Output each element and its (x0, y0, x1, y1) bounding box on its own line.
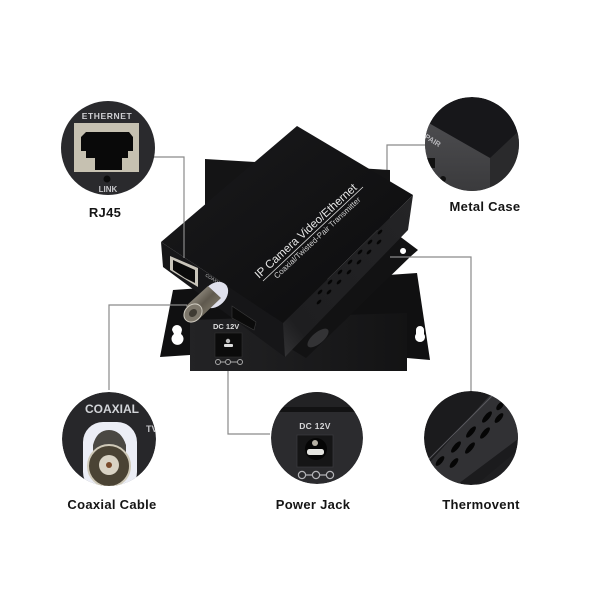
upper unit: RJ45 port (170, 256, 198, 287)
socket (74, 123, 139, 172)
label: thermovent: Thermovent (442, 497, 520, 512)
led (104, 176, 110, 182)
product photo: two stacked transceivers (160, 126, 430, 371)
case front face (425, 124, 490, 191)
case screw hole (440, 176, 446, 182)
upper unit: port label: COAXIAL (204, 273, 224, 287)
label: power jack: Power Jack (276, 497, 351, 512)
upper unit: front face (161, 242, 285, 357)
label: metal case: Metal Case (450, 199, 520, 214)
upper unit: side flange (288, 235, 418, 358)
lower unit: front face (190, 313, 407, 371)
polarity symbol (298, 471, 334, 479)
callout: RJ45 (61, 101, 155, 195)
ethernet caption: ETHERNET (82, 111, 133, 121)
connector line: RJ45 (153, 157, 184, 258)
white collar (83, 422, 137, 492)
barrel (93, 430, 126, 452)
callout: metal case (425, 97, 519, 191)
upper unit: printed title: IP Camera Video/Ethernet (253, 181, 360, 281)
label: coaxial cable: Coaxial Cable (67, 497, 157, 512)
vent highlight (428, 396, 492, 460)
lower unit: polarity symbol (216, 360, 242, 364)
connector line: coaxial (109, 305, 187, 390)
upper unit: right side (283, 195, 413, 357)
jack socket (297, 435, 333, 467)
upper unit: printed rule (263, 187, 363, 281)
callout: coaxial (62, 392, 158, 492)
dc caption: DC 12V (299, 421, 331, 431)
coaxial caption: COAXIAL (85, 402, 139, 416)
upper unit: BNC connector (180, 277, 233, 326)
bnc insulator (99, 455, 119, 475)
bnc outer ring (88, 445, 130, 487)
link caption: LINK (99, 185, 118, 194)
lower dark edge (476, 452, 516, 485)
lower unit: silkscreen: DC 12V (213, 322, 239, 331)
callout: power jack (270, 392, 364, 484)
jack opening (305, 438, 327, 460)
upper unit: top face (161, 126, 413, 323)
lower unit: power jack (215, 333, 242, 357)
tx caption: TV (146, 424, 158, 434)
label: RJ45: RJ45 (89, 205, 121, 220)
upper unit: thermal vents (316, 229, 383, 305)
case caption: PAIR (423, 132, 443, 149)
bnc pin (106, 462, 112, 468)
connector line: power jack (228, 368, 270, 434)
lower unit: back panel (205, 159, 390, 230)
case side face (490, 132, 519, 188)
lower unit: mounting flange (160, 273, 430, 370)
infographic canvas (61, 97, 520, 509)
vent strip (430, 395, 518, 484)
upper unit: flange slot (305, 325, 331, 351)
vent holes (434, 400, 505, 469)
socket opening (81, 132, 133, 170)
top dark band (283, 392, 351, 407)
jack contact (307, 449, 324, 455)
band line (279, 407, 355, 412)
connector line: metal case (387, 145, 428, 170)
connector line: thermovent (390, 257, 471, 392)
upper unit: twisted pair port (232, 306, 256, 330)
callout: thermovent (424, 391, 518, 485)
upper unit: printed subtitle: Coaxial/Twisted-Pair Transmitter (272, 195, 363, 280)
jack pin (312, 440, 318, 446)
case port (427, 158, 435, 168)
